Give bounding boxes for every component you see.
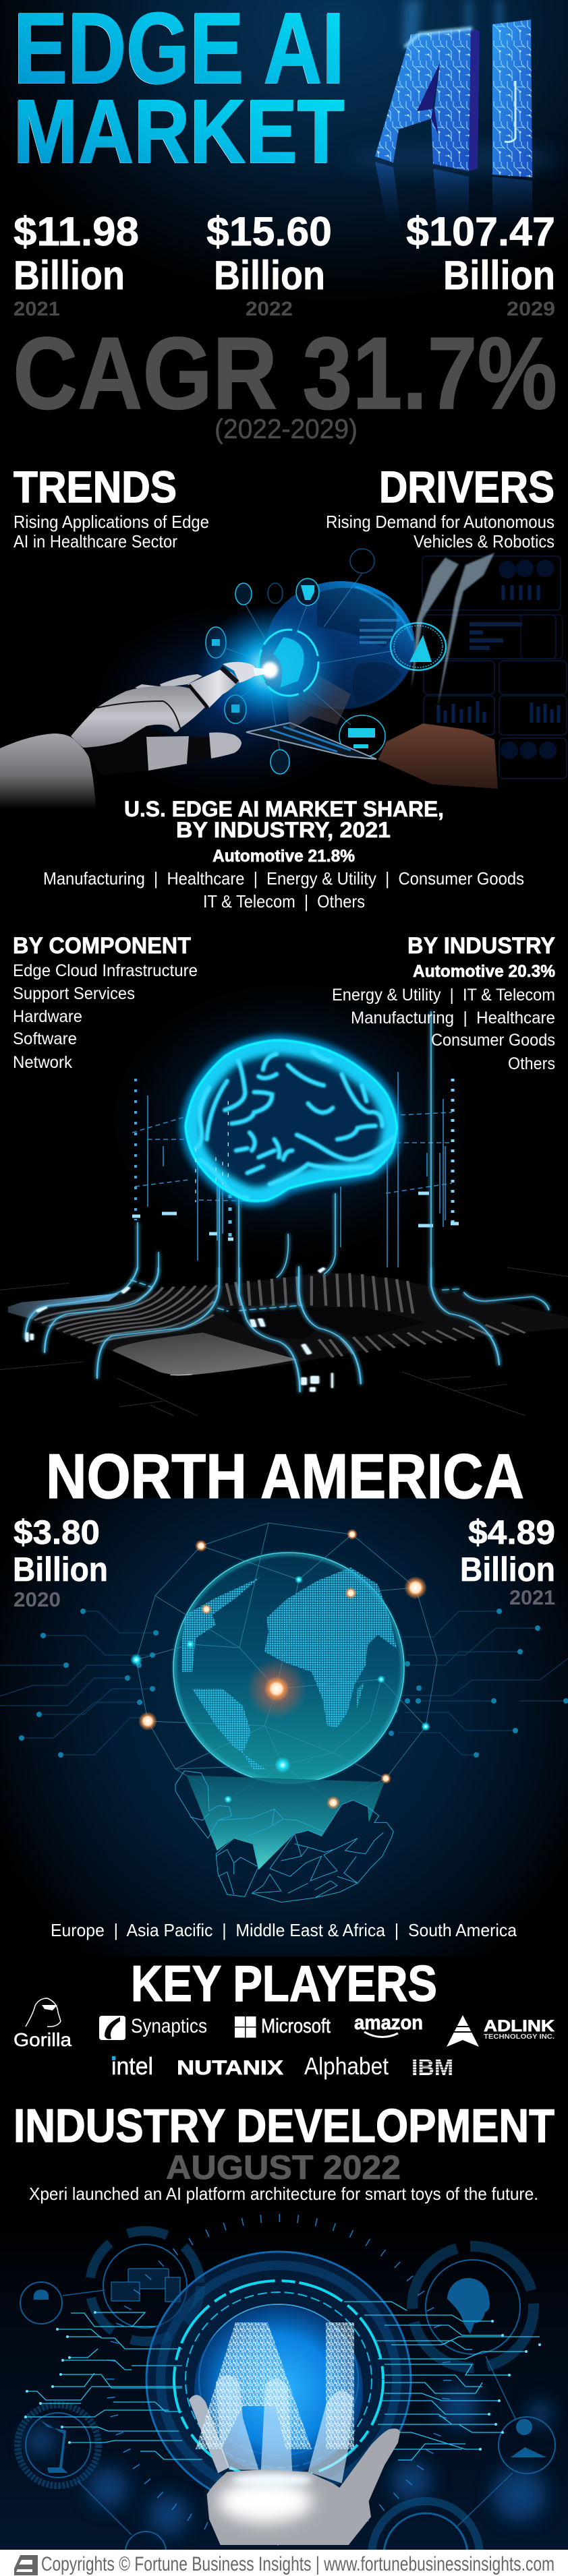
robot palm — [71, 686, 206, 748]
tablet — [246, 723, 376, 759]
logo: Microsoft: Microsoft — [261, 2015, 331, 2037]
dashboard panels — [422, 556, 567, 779]
panel: drivers: Rising Demand for Autonomous — [326, 512, 555, 532]
panel: by component — [13, 933, 198, 1072]
concentric rings — [110, 2218, 447, 2542]
chip stripes — [34, 1273, 526, 1357]
logo: Synaptics — [99, 2015, 207, 2040]
heading: North America: NORTH AMERICA — [46, 1441, 524, 1511]
stat: 2021 market size: Billion — [13, 253, 125, 298]
panel: trends — [13, 462, 209, 551]
panel: header — [0, 0, 568, 351]
glowing nodes — [130, 1529, 430, 1809]
panel: by industry: Others — [508, 1054, 555, 1073]
chip shadow — [217, 1307, 428, 1340]
stat: 2020 North America: 2020 — [13, 1588, 61, 1611]
panel: North America — [0, 1441, 568, 1956]
robot palm shadow — [83, 726, 169, 775]
stat: 2021 North America: 2021 — [509, 1586, 555, 1609]
stat: 2021 North America: Billion — [460, 1551, 555, 1588]
logo: intel: intel — [111, 2052, 153, 2080]
logo: Nutanix: NUTANIX — [177, 2057, 283, 2079]
stat: 2022 market size: Billion — [214, 253, 325, 298]
illustration: hand with holographic AI — [0, 2215, 568, 2576]
circuit lines — [0, 1611, 568, 1755]
panel: industry development — [13, 2099, 555, 2204]
icon circles — [18, 2231, 555, 2576]
panel: by component: BY COMPONENT — [13, 933, 191, 959]
stat: 2021 North America: $4.89 — [468, 1514, 555, 1551]
title: MARKET — [13, 82, 344, 183]
human hands — [378, 723, 498, 789]
robot arm — [0, 733, 96, 809]
robot knuckles back — [135, 674, 202, 690]
stat: 2020 North America — [13, 1514, 108, 1611]
panel: drivers — [326, 462, 555, 551]
leading segment: Automotive 21.8% — [212, 847, 355, 866]
logo: Microsoft — [235, 2015, 331, 2037]
stat: 2021 market size: 2021 — [13, 298, 60, 320]
heading: US market share: U.S. EDGE AI MARKET SHARE, — [124, 797, 444, 821]
panel: by component: Software — [13, 1029, 77, 1048]
stat: 2022 market size — [206, 209, 332, 320]
logo: Gorilla: Gorilla — [13, 2029, 72, 2050]
panel: by component: Support Services — [13, 984, 135, 1003]
stat: 2029 market size: Billion — [443, 253, 555, 298]
title — [13, 0, 345, 183]
icon glyphs — [34, 2269, 546, 2473]
segment list: Manufacturing | Healthcare | Energy & Utility | Consumer Goods — [43, 868, 524, 889]
hand — [175, 1771, 393, 1903]
panel: by industry: Automotive 20.3% — [413, 962, 555, 981]
stat: 2021 market size — [13, 209, 139, 320]
chip — [0, 1267, 568, 1416]
logo: amazon: amazon — [354, 2012, 423, 2034]
logo: Alphabet: Alphabet — [304, 2052, 389, 2080]
circuit dots — [19, 1609, 568, 1758]
panel: by industry: BY INDUSTRY — [407, 933, 555, 959]
illustration: robot hand touching digital globe — [0, 549, 567, 809]
development text: Xperi launched an AI platform architecture for smart toys of the future. — [29, 2184, 538, 2204]
CAGR headline: (2022-2029) — [215, 413, 358, 444]
panel: key players — [13, 1955, 555, 2080]
left circuit lines — [26, 2312, 202, 2459]
panel: by component: Hardware — [13, 1007, 82, 1026]
stat: 2022 market size: 2022 — [246, 298, 293, 320]
icon: circuit AI letters — [345, 0, 561, 229]
network mesh — [136, 1523, 437, 1809]
stat: 2020 North America: $3.80 — [13, 1514, 100, 1551]
icon rings — [206, 549, 446, 774]
heading: US market share — [43, 797, 524, 911]
segment list — [43, 868, 524, 911]
logo: ADLINK — [447, 2015, 555, 2047]
stat: 2021 market size: $11.98 — [13, 209, 139, 254]
heading: US market share: BY INDUSTRY, 2021 — [176, 818, 391, 842]
logo: Synaptics: Synaptics — [131, 2015, 207, 2037]
other regions: Europe | Asia Pacific | Middle East & Africa | South America — [51, 1920, 517, 1940]
man's shirt and tie — [411, 553, 494, 710]
icon: Fortune Business Insights logo — [14, 2555, 38, 2575]
circuit dots — [24, 2311, 541, 2451]
stat: 2029 market size: 2029 — [507, 298, 555, 320]
heading: key players: KEY PLAYERS — [131, 1955, 437, 2012]
logo: IBM: IBM — [411, 2055, 453, 2080]
logo: ADLINK: TECHNOLOGY INC. — [484, 2033, 555, 2041]
robot thumb — [146, 736, 189, 771]
title: MARKET — [13, 82, 345, 182]
panel: by industry: Manufacturing | Healthcare — [351, 1009, 555, 1027]
data columns — [132, 1072, 459, 1267]
glowing core with head icon — [197, 605, 345, 733]
panel: trends: Rising Applications of Edge — [13, 512, 209, 532]
right circuit lines — [344, 2302, 540, 2460]
stat: 2029 market size: $107.47 — [406, 209, 555, 254]
panel: by industry: Consumer Goods — [431, 1031, 555, 1050]
logo: ADLINK: ADLINK — [484, 2017, 555, 2035]
globe — [173, 1553, 404, 1783]
illustration: glowing brain over chip — [0, 964, 568, 1416]
panel: by industry — [332, 933, 555, 1073]
faint board traces — [0, 1267, 568, 1416]
panel: by component: Edge Cloud Infrastructure — [13, 961, 198, 980]
stat: 2029 market size — [406, 209, 555, 320]
brain — [169, 1031, 416, 1211]
AI letters — [196, 2323, 354, 2449]
panel: by component: Network — [13, 1053, 72, 1072]
stat: 2020 North America: Billion — [13, 1551, 108, 1588]
globe — [266, 581, 415, 709]
open hand — [189, 2375, 400, 2545]
glowing traces — [26, 1011, 549, 1392]
lines between icons — [223, 573, 395, 752]
chip glow markers — [26, 1267, 333, 1391]
panel: by industry: Energy & Utility | IT & Telecom — [332, 986, 555, 1005]
robot index finger — [188, 669, 239, 708]
footer — [0, 2550, 568, 2576]
panel: drivers: Vehicles & Robotics — [414, 531, 555, 551]
panel: trends: AI in Healthcare Sector — [13, 531, 177, 551]
stat: 2022 market size: $15.60 — [206, 209, 332, 254]
logo: Gorilla — [13, 1998, 72, 2050]
panel: trends: TRENDS — [13, 462, 177, 512]
stat: 2021 North America — [460, 1514, 555, 1609]
segment list: IT & Telecom | Others — [203, 891, 365, 911]
date: AUGUST 2022 — [166, 2149, 401, 2186]
